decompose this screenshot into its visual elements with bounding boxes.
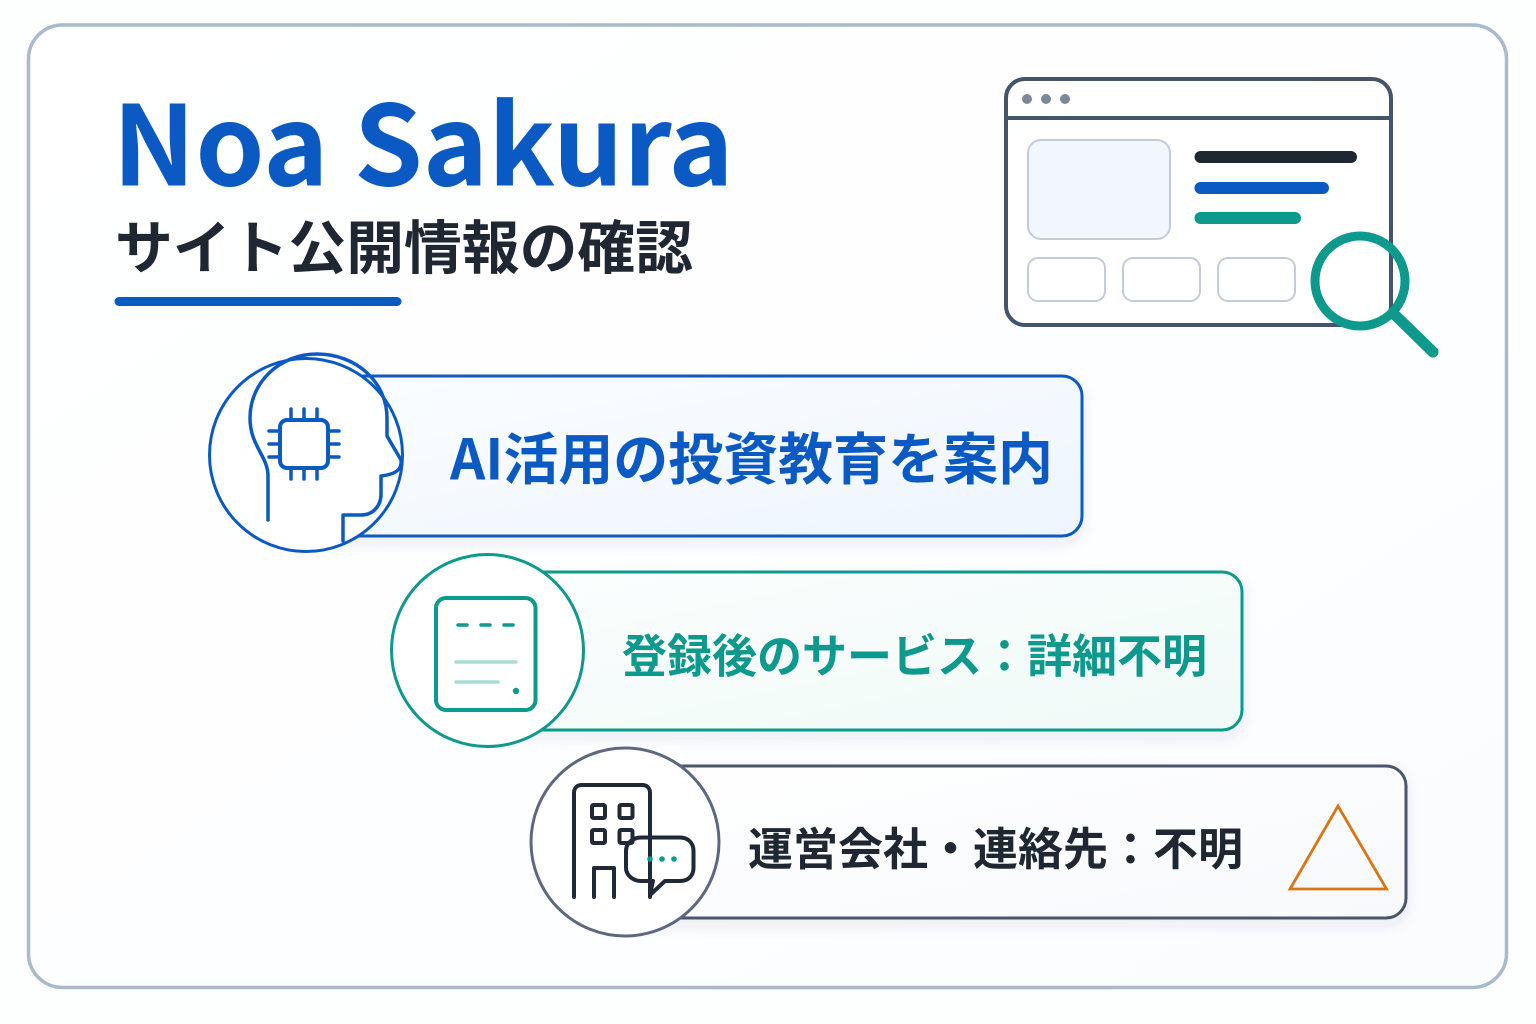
icon: warning triangle bbox=[1290, 806, 1386, 889]
panel: AI investment education bbox=[210, 354, 1082, 552]
title: Noa Sakura bbox=[112, 58, 734, 218]
label: operator: 運営会社・連絡先：不明 bbox=[748, 813, 1243, 878]
label: service: 登録後のサービス：詳細不明 bbox=[622, 620, 1207, 686]
icon: AI head with chip bbox=[210, 354, 402, 552]
icon: document bbox=[392, 554, 584, 746]
icon: browser window with magnifier bbox=[1006, 79, 1433, 352]
subtitle: サイト公開情報の確認 bbox=[115, 202, 693, 286]
panel: operator and contact bbox=[531, 748, 1406, 936]
title underline bbox=[114, 297, 402, 306]
label: AI: AI活用の投資教育を案内 bbox=[449, 416, 1053, 496]
panel: post-registration service bbox=[392, 554, 1242, 746]
icon: building with speech bubble bbox=[531, 748, 719, 936]
